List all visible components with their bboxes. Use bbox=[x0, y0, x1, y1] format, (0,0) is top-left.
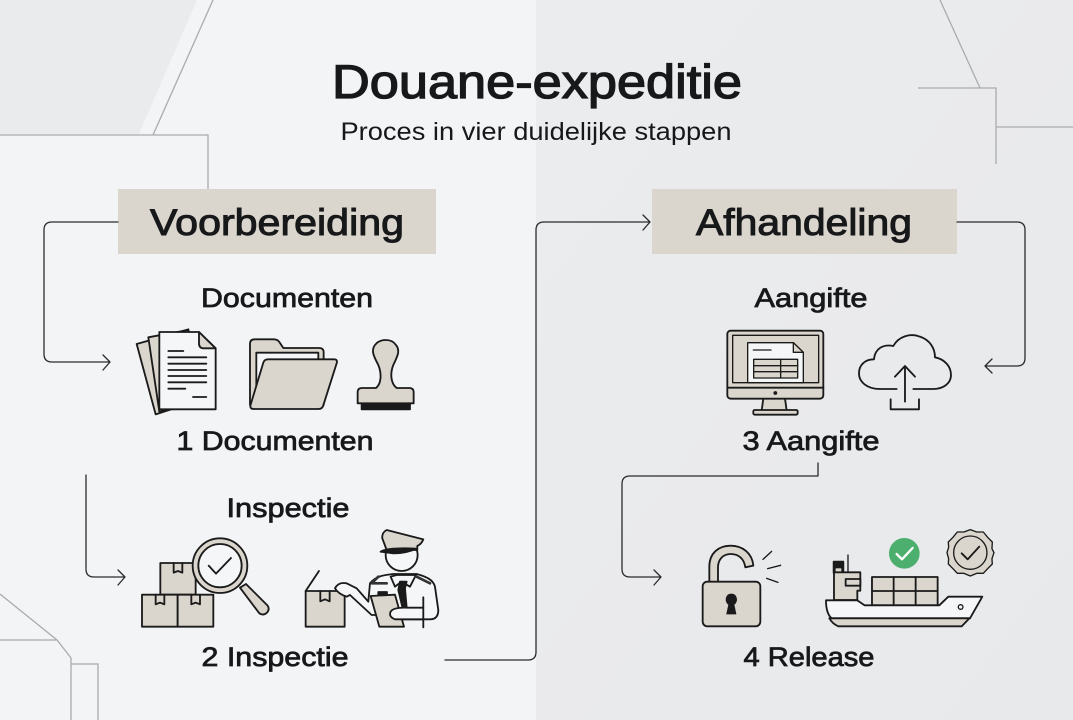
arrow: Inspectie to Afhandeling bbox=[445, 215, 650, 660]
heading: Voorbereiding bbox=[118, 189, 436, 254]
heading: Afhandeling: Afhandeling bbox=[696, 202, 912, 243]
icon: customs officer bbox=[306, 530, 438, 627]
panel: Afhandeling bbox=[652, 189, 994, 672]
icon: stamp bbox=[358, 340, 414, 409]
heading: Afhandeling bbox=[652, 189, 957, 254]
panel: Voorbereiding bbox=[118, 189, 438, 672]
icon: approval seal bbox=[947, 530, 994, 576]
subtitle: Proces in vier duidelijke stappen bbox=[340, 118, 732, 146]
arrow: Afhandeling to Aangifte bbox=[957, 222, 1025, 373]
arrow: Voorbereiding to Documenten bbox=[44, 222, 118, 370]
label: Inspectie: Inspectie bbox=[226, 493, 350, 523]
icon: document stack bbox=[137, 329, 216, 414]
label: Aangifte: Aangifte bbox=[754, 283, 868, 313]
label: 3 Aangifte: 3 Aangifte bbox=[742, 426, 880, 456]
icon: green check bbox=[889, 538, 920, 569]
icon: folder bbox=[250, 339, 337, 409]
icon: computer monitor with form bbox=[727, 331, 823, 415]
label: 2 Inspectie: 2 Inspectie bbox=[202, 642, 348, 672]
icon: open padlock bbox=[703, 546, 781, 626]
label: Documenten: Documenten bbox=[201, 283, 373, 313]
arrow: Documenten to Inspectie bbox=[86, 475, 125, 585]
icon: container ship bbox=[826, 555, 982, 626]
label: 1 Documenten: 1 Documenten bbox=[176, 426, 374, 456]
title: Douane-expeditie bbox=[332, 55, 742, 108]
heading: Voorbereiding: Voorbereiding bbox=[150, 202, 404, 243]
arrow: Aangifte to Release bbox=[622, 463, 818, 585]
icon: boxes with magnifier bbox=[142, 538, 269, 627]
icon: cloud upload bbox=[859, 335, 951, 409]
label: 4 Release: 4 Release bbox=[744, 642, 874, 672]
